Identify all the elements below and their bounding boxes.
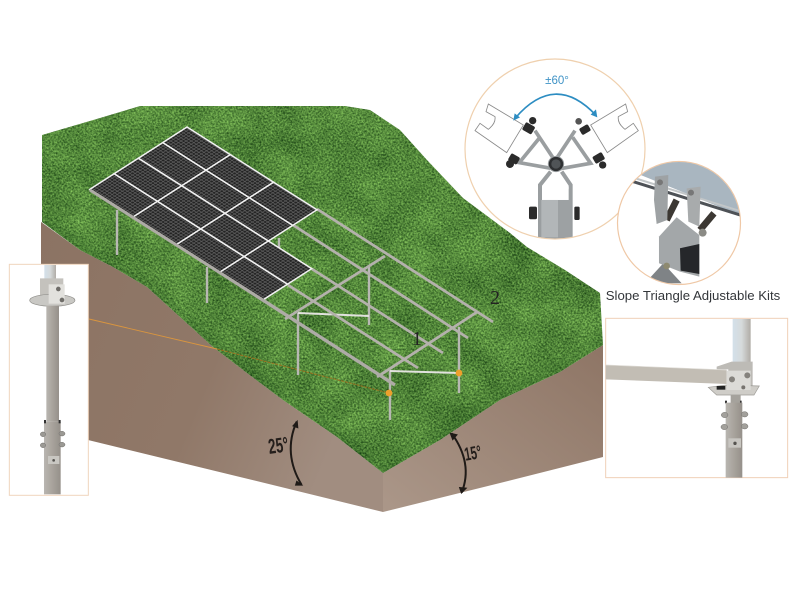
- slope angle 25 degrees: 25°: [267, 432, 290, 459]
- caption: kit name: Slope Triangle Adjustable Kits: [606, 288, 781, 303]
- rotation angle label: ±60°: [545, 75, 569, 87]
- callout circle: kit photo: [618, 160, 743, 284]
- row 3: [114, 158, 182, 201]
- clamps: [654, 175, 668, 224]
- diagonal braces: [298, 313, 459, 373]
- right soil face: [383, 345, 603, 512]
- grass surface: [40, 100, 610, 480]
- module underside: [641, 162, 740, 215]
- callout circle: rotation detail: [465, 59, 645, 239]
- plate: [708, 385, 759, 395]
- orange measure line: [89, 319, 389, 393]
- infographic canvas: [8, 58, 788, 512]
- label: rail number 1: 1: [412, 328, 422, 350]
- mounting frame: [90, 189, 493, 420]
- label: rail number 2: 2: [490, 287, 500, 309]
- base block: [650, 264, 682, 284]
- horizontal beam: [606, 365, 727, 384]
- post above plate: [44, 265, 56, 285]
- dark arms: [667, 200, 677, 220]
- front long rail: [90, 189, 395, 385]
- rotation arrow: [515, 94, 596, 118]
- front rail edge over panels: [90, 190, 266, 302]
- slope angle 25 degrees: [267, 421, 302, 485]
- base plate: [30, 294, 75, 306]
- posts: [117, 210, 459, 420]
- right rail profile: [591, 104, 638, 153]
- orange anchor dots: [386, 370, 462, 396]
- bolts: [40, 431, 65, 448]
- rail: [633, 182, 740, 215]
- bolts: [721, 412, 748, 430]
- left soil face: [41, 222, 383, 512]
- slope angle 15 degrees: [450, 433, 483, 493]
- row 1: [163, 127, 230, 170]
- bracket: [40, 278, 63, 305]
- row 2: [138, 143, 206, 186]
- terrain block: [40, 100, 610, 512]
- slope angle 15 degrees: 15°: [463, 442, 483, 466]
- left rail profile: [475, 104, 523, 153]
- pile shaft: [46, 306, 59, 422]
- vertical post: [733, 319, 751, 366]
- pile shaft: [731, 395, 741, 403]
- triangle arms: [519, 131, 591, 169]
- row 4: [90, 174, 157, 217]
- hub: [548, 156, 564, 172]
- upper bracket: [717, 362, 753, 388]
- panel: pile detail left: [9, 264, 88, 495]
- clamp face: [727, 371, 751, 390]
- side bolts: [529, 207, 537, 219]
- panel: joint detail right: [606, 318, 788, 478]
- rails: [285, 209, 493, 377]
- solar panel array: [90, 127, 317, 300]
- clamp bolts: [506, 117, 606, 169]
- yoke: [540, 172, 571, 237]
